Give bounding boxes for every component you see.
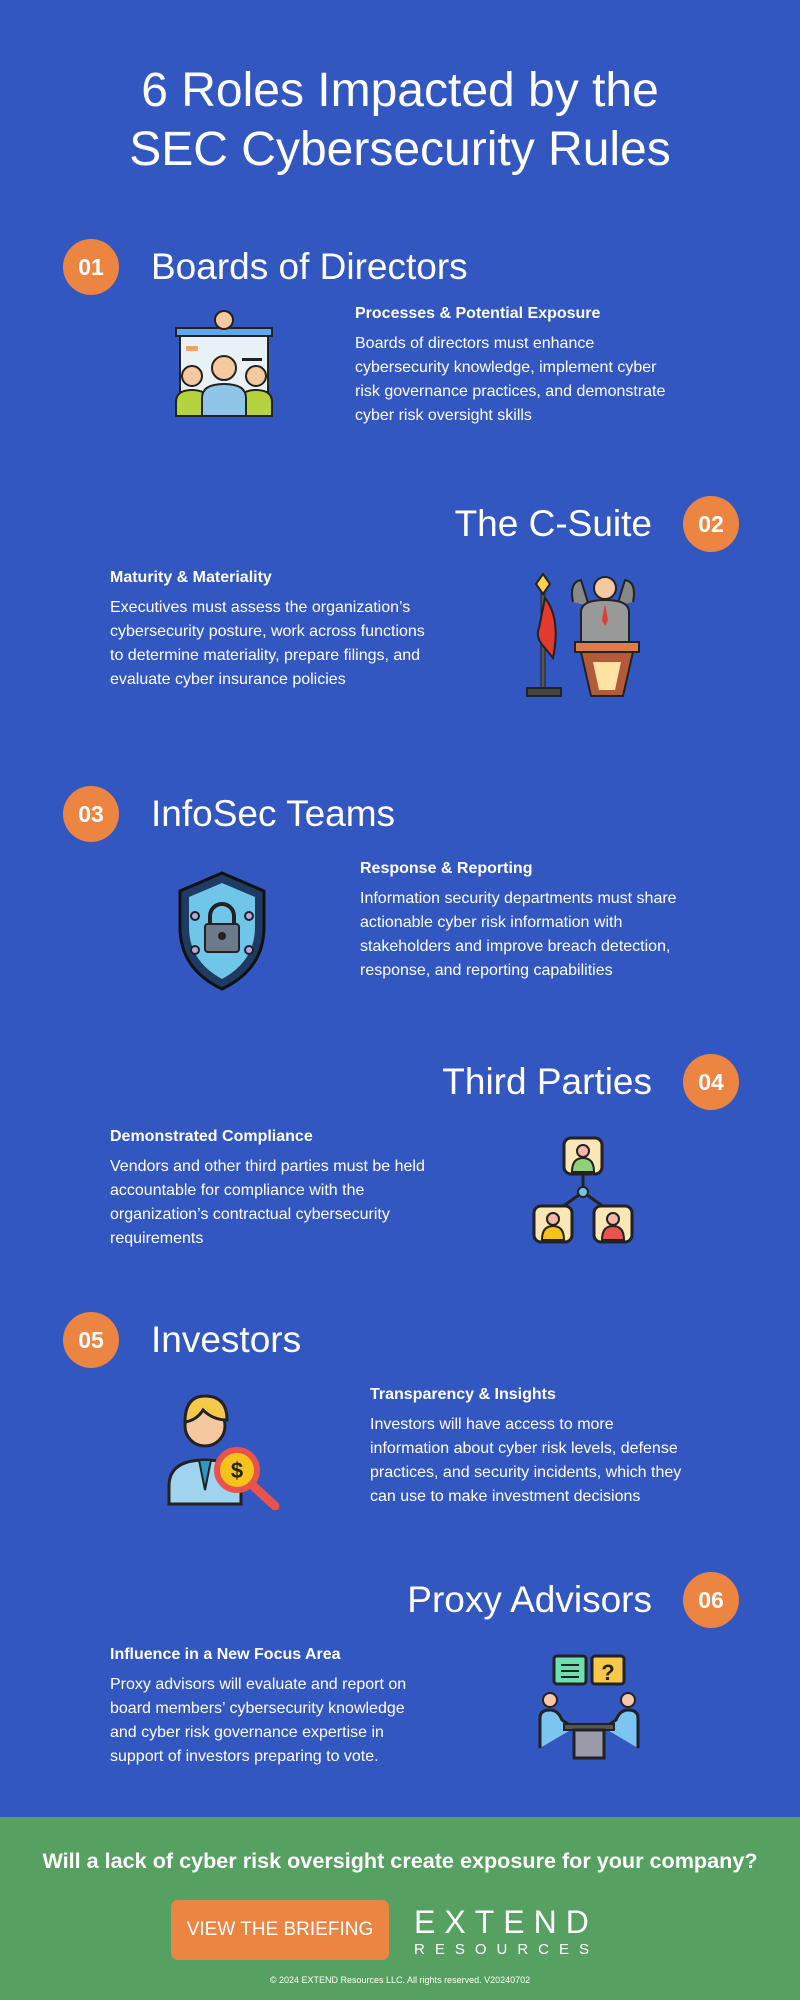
heading: Proxy Advisors bbox=[407, 1579, 652, 1620]
section 3: infosec teams bbox=[63, 786, 677, 991]
text block: accountable for compliance with the bbox=[110, 1182, 364, 1199]
section 6: proxy advisors bbox=[110, 1572, 739, 1765]
text block: Influence in a New Focus Area bbox=[110, 1646, 341, 1663]
heading: Boards of Directors bbox=[151, 246, 468, 287]
footer call to action bbox=[0, 1817, 800, 2000]
text block: actionable cyber risk information with bbox=[360, 914, 622, 931]
section 2: the c-suite bbox=[110, 496, 739, 697]
text block: Proxy advisors will evaluate and report on bbox=[110, 1676, 406, 1693]
icon: two people discussing at table bbox=[538, 1654, 640, 1760]
text block: organization’s contractual cybersecurity bbox=[110, 1206, 390, 1223]
icon: speaker at podium bbox=[526, 572, 640, 697]
text block: Executives must assess the organization’s bbox=[110, 599, 410, 616]
text block bbox=[110, 569, 425, 688]
text block: Demonstrated Compliance bbox=[110, 1128, 313, 1145]
icon: board meeting bbox=[175, 310, 273, 417]
logo bbox=[414, 1904, 599, 1958]
text block: evaluate cyber insurance policies bbox=[110, 671, 346, 688]
text block: cybersecurity posture, work across functions bbox=[110, 623, 425, 640]
icon: two people discussing at table: ? bbox=[601, 1660, 615, 1685]
text block bbox=[360, 860, 677, 979]
logo: EXTEND bbox=[414, 1904, 598, 1940]
number badge 03: 03 bbox=[78, 801, 104, 827]
text block: practices, and security incidents, which they bbox=[370, 1464, 681, 1481]
text block bbox=[110, 1646, 406, 1765]
text block: board members’ cybersecurity knowledge bbox=[110, 1700, 405, 1717]
section 5: investors bbox=[63, 1312, 682, 1510]
section 1: boards of directors bbox=[63, 239, 665, 424]
text block: Investors will have access to more bbox=[370, 1416, 614, 1433]
button: VIEW THE BRIEFING bbox=[187, 1919, 373, 1940]
title bbox=[129, 64, 671, 176]
text block: risk governance practices, and demonstrate bbox=[355, 383, 665, 400]
text block: requirements bbox=[110, 1230, 203, 1247]
text block: cybersecurity knowledge, implement cyber bbox=[355, 359, 656, 376]
number badge 04: 04 bbox=[698, 1069, 724, 1095]
text block: Processes & Potential Exposure bbox=[355, 305, 600, 322]
text block: Transparency & Insights bbox=[370, 1386, 556, 1403]
number badge 02: 02 bbox=[698, 511, 724, 537]
text block: can use to make investment decisions bbox=[370, 1488, 640, 1505]
heading: Third Parties bbox=[442, 1061, 652, 1102]
text block: support of investors preparing to vote. bbox=[110, 1748, 379, 1765]
number badge 04 bbox=[683, 1054, 739, 1110]
heading: The C-Suite bbox=[455, 503, 652, 544]
text block bbox=[355, 305, 665, 424]
text block: to determine materiality, prepare filings, and bbox=[110, 647, 420, 664]
text block: stakeholders and improve breach detection, bbox=[360, 938, 670, 955]
number badge 06 bbox=[683, 1572, 739, 1628]
icon: investor with magnifier bbox=[168, 1394, 280, 1510]
text block: and cyber risk governance expertise in bbox=[110, 1724, 384, 1741]
number badge 06: 06 bbox=[698, 1587, 724, 1613]
number badge 03 bbox=[63, 786, 119, 842]
text block: Boards of directors must enhance bbox=[355, 335, 594, 352]
text block bbox=[370, 1386, 682, 1505]
text block: Information security departments must share bbox=[360, 890, 677, 907]
heading: Investors bbox=[151, 1319, 301, 1360]
number badge 05: 05 bbox=[78, 1327, 104, 1353]
text block: cyber risk oversight skills bbox=[355, 407, 532, 424]
heading: InfoSec Teams bbox=[151, 793, 395, 834]
text block: Vendors and other third parties must be held bbox=[110, 1158, 425, 1175]
icon: shield with lock bbox=[178, 871, 266, 991]
text block: information about cyber risk levels, defense bbox=[370, 1440, 678, 1457]
icon: investor with magnifier: $ bbox=[231, 1458, 243, 1483]
text block: Response & Reporting bbox=[360, 860, 532, 877]
number badge 02 bbox=[683, 496, 739, 552]
copyright: © 2024 EXTEND Resources LLC. All rights reserved. V20240702 bbox=[270, 1975, 530, 1985]
text block bbox=[110, 1128, 425, 1247]
number badge 05 bbox=[63, 1312, 119, 1368]
title: 6 Roles Impacted by the bbox=[141, 64, 659, 117]
text block: Maturity & Materiality bbox=[110, 569, 272, 586]
icon: network of people bbox=[532, 1136, 634, 1244]
number badge 01: 01 bbox=[78, 254, 104, 280]
text block: response, and reporting capabilities bbox=[360, 962, 613, 979]
button bbox=[171, 1900, 389, 1960]
logo: RESOURCES bbox=[414, 1941, 599, 1958]
question: Will a lack of cyber risk oversight create exposure for your company? bbox=[42, 1848, 758, 1873]
section 4: third parties bbox=[110, 1054, 739, 1247]
number badge 01 bbox=[63, 239, 119, 295]
title: SEC Cybersecurity Rules bbox=[129, 123, 671, 176]
